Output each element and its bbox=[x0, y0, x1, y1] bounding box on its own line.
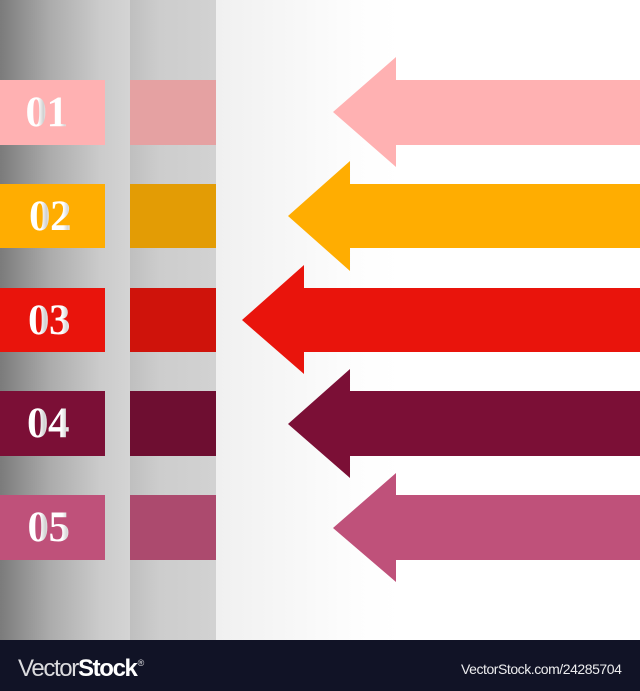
panel: fading white background bbox=[216, 0, 400, 640]
arrow 04 bbox=[288, 369, 640, 478]
shaded band 04 bbox=[130, 391, 216, 456]
footer image id: VectorStock.com/24285704 bbox=[461, 661, 621, 677]
arrow 02 bbox=[288, 161, 640, 271]
number tab 04 bbox=[0, 391, 105, 456]
number tab 01 bbox=[0, 80, 105, 145]
number tab 02: 02 bbox=[29, 193, 71, 240]
shaded band 05 bbox=[130, 495, 216, 560]
arrow 03 bbox=[242, 265, 640, 374]
footer bar bbox=[0, 640, 640, 691]
shaded band 01 bbox=[130, 80, 216, 145]
number tab 01: 01 bbox=[26, 89, 68, 136]
number tab 02 bbox=[0, 184, 105, 248]
shaded band 02 bbox=[130, 184, 216, 248]
number tab 03: 03 bbox=[28, 297, 70, 344]
number tab 05 bbox=[0, 495, 105, 560]
number tab 04: 04 bbox=[27, 400, 69, 447]
arrow 01 bbox=[333, 57, 640, 167]
arrow 05 bbox=[333, 473, 640, 582]
panel: left gradient column bbox=[0, 0, 130, 640]
number tab 05: 05 bbox=[28, 504, 70, 551]
footer logo: VectorStock® bbox=[18, 655, 143, 682]
number tab 03 bbox=[0, 288, 105, 352]
panel: second gray column bbox=[130, 0, 216, 640]
shaded band 03 bbox=[130, 288, 216, 352]
